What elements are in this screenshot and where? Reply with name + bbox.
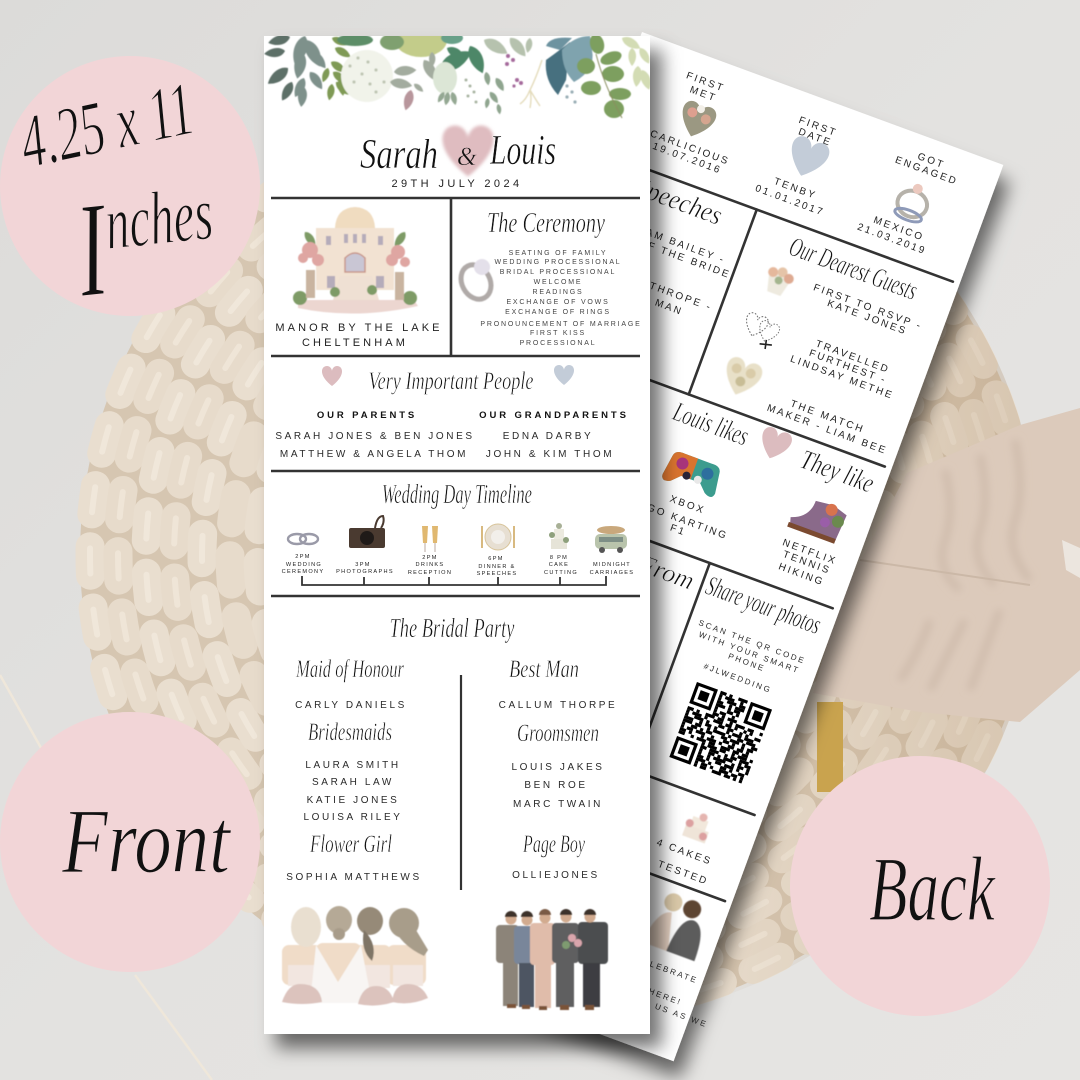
- badge: front: [0, 712, 260, 972]
- panel: bridal party: OLLIEJONES: [512, 870, 600, 881]
- section: how we met: FIRST: [797, 115, 839, 139]
- section: how we met: ENGAGED: [893, 155, 959, 188]
- badge: size: [0, 56, 260, 326]
- section: share your photos: SCAN THE QR CODE: [697, 618, 807, 666]
- panel: bridal party: BEN ROE: [524, 780, 588, 791]
- pale ferns right: [622, 36, 650, 90]
- section: speeches: LIAM BAILEY -: [632, 223, 727, 266]
- panel: bridal party: CARLY DANIELS: [295, 700, 407, 711]
- panel: bridal party: Flower Girl: [309, 831, 392, 858]
- icon: heart lock: [675, 99, 719, 142]
- panel: bridal party: LOUIS JAKES: [511, 762, 605, 773]
- section: celebrate: CELEBRATE: [634, 954, 699, 985]
- section: how we met: DATE: [797, 127, 834, 149]
- icon: camera: [349, 516, 385, 548]
- section: how we met: GOT: [916, 151, 946, 171]
- panel: bridal party: Best Man: [509, 656, 579, 683]
- section: cakes tested: 4 CAKES: [655, 837, 714, 868]
- section: how we met: CARLICIOUS: [648, 128, 731, 168]
- icon: engagement ring: [892, 179, 934, 225]
- panel: timeline: DRINKS: [416, 562, 444, 568]
- panel: bridal party: SOPHIA MATTHEWS: [286, 872, 422, 883]
- section: likes: HIKING: [777, 561, 826, 588]
- icon: plate and cutlery: [482, 524, 514, 550]
- section: how we met: 21.03.2019: [856, 222, 928, 257]
- section: how we met: MEXICO: [872, 215, 926, 244]
- section: likes: GO KARTING: [645, 502, 730, 542]
- panel: timeline: CEREMONY: [282, 569, 324, 575]
- section: how we met: [643, 62, 963, 259]
- badge: size: nches: [101, 171, 216, 266]
- section: celebrate: HERE!: [647, 987, 683, 1007]
- dried twigs: [0, 675, 212, 1080]
- title names: Louis: [489, 128, 556, 174]
- section: speeches: [565, 159, 753, 329]
- title names: Sarah: [360, 132, 438, 178]
- section: how we met: 01.01.2017: [754, 183, 826, 219]
- icon: wedding rings: [288, 534, 318, 544]
- section: share your photos: PHONE: [727, 651, 767, 673]
- section: our dearest guests: FURTHEST -: [808, 348, 888, 387]
- icon: flower heart: [719, 355, 765, 401]
- section: how we met: TENBY: [772, 176, 818, 202]
- icon: watercolour heart: [442, 126, 494, 176]
- panel: ceremony: SEATING OF FAMILY: [509, 250, 607, 257]
- icon: game controller: [661, 449, 724, 498]
- panel: timeline: 2PM: [295, 554, 311, 560]
- icon: pink heart small: [322, 366, 342, 386]
- section: our dearest guests: KATE JONES: [826, 298, 909, 338]
- panel: ceremony: PRONOUNCEMENT OF MARRIAGE: [480, 321, 642, 328]
- section: likes: [633, 393, 879, 593]
- back card: [312, 32, 1021, 1068]
- section: our dearest guests: LINDSAY METHE: [789, 354, 895, 402]
- section: likes: TENNIS: [781, 549, 832, 577]
- illustration: manor: [293, 207, 418, 314]
- panel: bridal party: Maid of Honour: [295, 656, 404, 683]
- woven placemat: [76, 85, 1040, 1025]
- green fern: [321, 36, 351, 101]
- panel: timeline: DINNER &: [478, 564, 516, 570]
- panel: timeline: 2PM: [422, 555, 438, 561]
- foliage border: [264, 36, 650, 119]
- badge: size: I: [69, 174, 117, 326]
- section: share your photos: WITH YOUR SMART: [697, 630, 801, 675]
- section: share your photos: Share your photos: [702, 570, 825, 641]
- ribbon: [813, 408, 1080, 722]
- panel: bridal party: Page Boy: [522, 831, 586, 858]
- wedding date: 29TH JULY 2024: [392, 178, 522, 190]
- icon: cake: [549, 523, 569, 549]
- icon: diamond ring: [455, 259, 497, 304]
- blue leaves: [546, 42, 570, 95]
- panel: timeline: PHOTOGRAPHS: [336, 569, 394, 575]
- section: likes: NETFLIX: [781, 537, 838, 567]
- timeline bracket: [302, 576, 606, 585]
- icon: blue heart small: [554, 365, 574, 385]
- icon: floral boots: [787, 492, 849, 544]
- panel: venue: [275, 207, 443, 349]
- panel: timeline: 6PM: [488, 556, 504, 562]
- badge: back: [790, 756, 1050, 1016]
- panel: ceremony: EXCHANGE OF RINGS: [505, 309, 611, 316]
- panel: ceremony: READINGS: [533, 289, 583, 296]
- panel: venue: CHELTENHAM: [302, 337, 408, 349]
- section: speeches: Speeches: [631, 172, 726, 232]
- section: our dearest guests: [716, 225, 947, 457]
- section: our dearest guests: FIRST TO RSVP -: [812, 282, 924, 332]
- section: share your photos: [647, 570, 825, 789]
- panel: ceremony: WEDDING PROCESSIONAL: [494, 259, 622, 266]
- panel: ceremony: [455, 208, 642, 347]
- divider lines back: [370, 151, 953, 901]
- panel: timeline: 3PM: [355, 562, 371, 568]
- section: how we met: FIRST: [685, 70, 726, 95]
- section: how we met: 19.07.2016: [651, 141, 723, 177]
- panel: timeline: CAKE: [549, 562, 569, 568]
- panel: timeline: CUTTING: [544, 570, 578, 576]
- central leaves: [398, 36, 447, 58]
- panel: very important people: JOHN & KIM THOM: [486, 449, 614, 460]
- panel: venue: MANOR BY THE LAKE: [275, 322, 443, 334]
- icon: cake: [681, 809, 714, 844]
- section: our dearest guests: Our Dearest Guests: [785, 231, 921, 307]
- grey leaves left: [264, 36, 294, 101]
- panel: very important people: [275, 365, 629, 460]
- section: speeches: CALLUM THROPE -: [592, 260, 714, 314]
- section: cakes tested: TESTED: [656, 859, 710, 888]
- panel: bridal party: CALLUM THORPE: [499, 700, 617, 711]
- panel: ceremony: The Ceremony: [487, 208, 605, 239]
- section: likes: F1: [669, 523, 688, 539]
- round green leaves: [577, 33, 631, 118]
- section: celebrate: JOIN US AS WE: [625, 991, 709, 1029]
- section: likes: Louis likes: [668, 396, 753, 452]
- panel: ceremony: BRIDAL PROCESSIONAL: [500, 269, 616, 276]
- badge: front: Front: [61, 790, 232, 892]
- section: likes: They like: [796, 444, 878, 500]
- section: our dearest guests: TRAVELLED: [814, 339, 891, 376]
- section: our dearest guests: MAKER - LIAM BEE: [765, 403, 889, 457]
- panel: bridal party: The Bridal Party: [390, 613, 515, 643]
- panel: ceremony: PROCESSIONAL: [520, 340, 596, 347]
- icon: champagne glasses: [422, 526, 438, 552]
- panel: timeline: 8 PM: [550, 555, 568, 561]
- panel: very important people: OUR GRANDPARENTS: [479, 410, 629, 421]
- QR code: [670, 683, 771, 783]
- illustration: kissing couple: [642, 888, 714, 961]
- white flower cluster: [341, 50, 393, 102]
- badge: back: Back: [869, 838, 996, 940]
- panel: ceremony: WELCOME: [534, 279, 582, 286]
- panel: timeline: [282, 479, 634, 585]
- panel: bridal party: LAURA SMITH: [305, 760, 401, 771]
- section: celebrate: [621, 888, 746, 1029]
- divider lines front: [271, 198, 640, 890]
- panel: bridal party: KATIE JONES: [307, 795, 399, 806]
- panel: very important people: EDNA DARBY: [503, 431, 593, 442]
- panel: ceremony: EXCHANGE OF VOWS: [506, 299, 610, 306]
- icon: camper van: [595, 526, 627, 553]
- illustration: groomsmen: [496, 909, 608, 1010]
- section: likes: XBOX: [668, 494, 707, 517]
- panel: timeline: SPEECHES: [477, 571, 517, 577]
- section: share your photos: #JLWEDDING: [702, 662, 773, 695]
- badge: size: 4.25 x 11: [12, 66, 201, 185]
- icon: bouquet: [762, 263, 797, 298]
- illustration: bridesmaids: [282, 906, 428, 1006]
- panel: bridal party: [282, 613, 617, 1010]
- icon: blue heart: [783, 134, 832, 182]
- panel: timeline: MIDNIGHT: [593, 562, 631, 568]
- panel: timeline: CARRIAGES: [590, 570, 634, 576]
- panel: ceremony: FIRST KISS: [530, 330, 586, 337]
- panel: bridal party: LOUISA RILEY: [303, 812, 403, 823]
- icon: dotted hearts with plane: [739, 311, 782, 351]
- title names: &: [457, 142, 478, 171]
- title names: [360, 126, 556, 178]
- panel: very important people: OUR PARENTS: [317, 410, 417, 421]
- section: our dearest guests: THE MATCH: [789, 399, 866, 436]
- section: speeches: BEST MAN: [616, 284, 684, 318]
- panel: bridal party: SARAH LAW: [312, 777, 394, 788]
- panel: very important people: MATTHEW & ANGELA THOM: [280, 449, 468, 460]
- panel: very important people: SARAH JONES & BEN JONES: [275, 431, 475, 442]
- panel: bridal party: Groomsmen: [517, 720, 599, 747]
- panel: timeline: Wedding Day Timeline: [382, 479, 532, 509]
- section: speeches: FATHER OF THE BRIDE: [583, 217, 732, 281]
- panel: bridal party: MARC TWAIN: [513, 799, 603, 810]
- panel: bridal party: Bridesmaids: [308, 719, 392, 746]
- section: cakes tested: [648, 802, 730, 888]
- icon: pink heart: [756, 425, 794, 463]
- gold stick: [817, 702, 843, 792]
- section: sent from: Sent From: [587, 531, 698, 596]
- panel: very important people: Very Important People: [368, 368, 534, 395]
- section: how we met: MET: [688, 84, 718, 104]
- panel: timeline: RECEPTION: [408, 570, 452, 576]
- panel: timeline: WEDDING: [286, 562, 322, 568]
